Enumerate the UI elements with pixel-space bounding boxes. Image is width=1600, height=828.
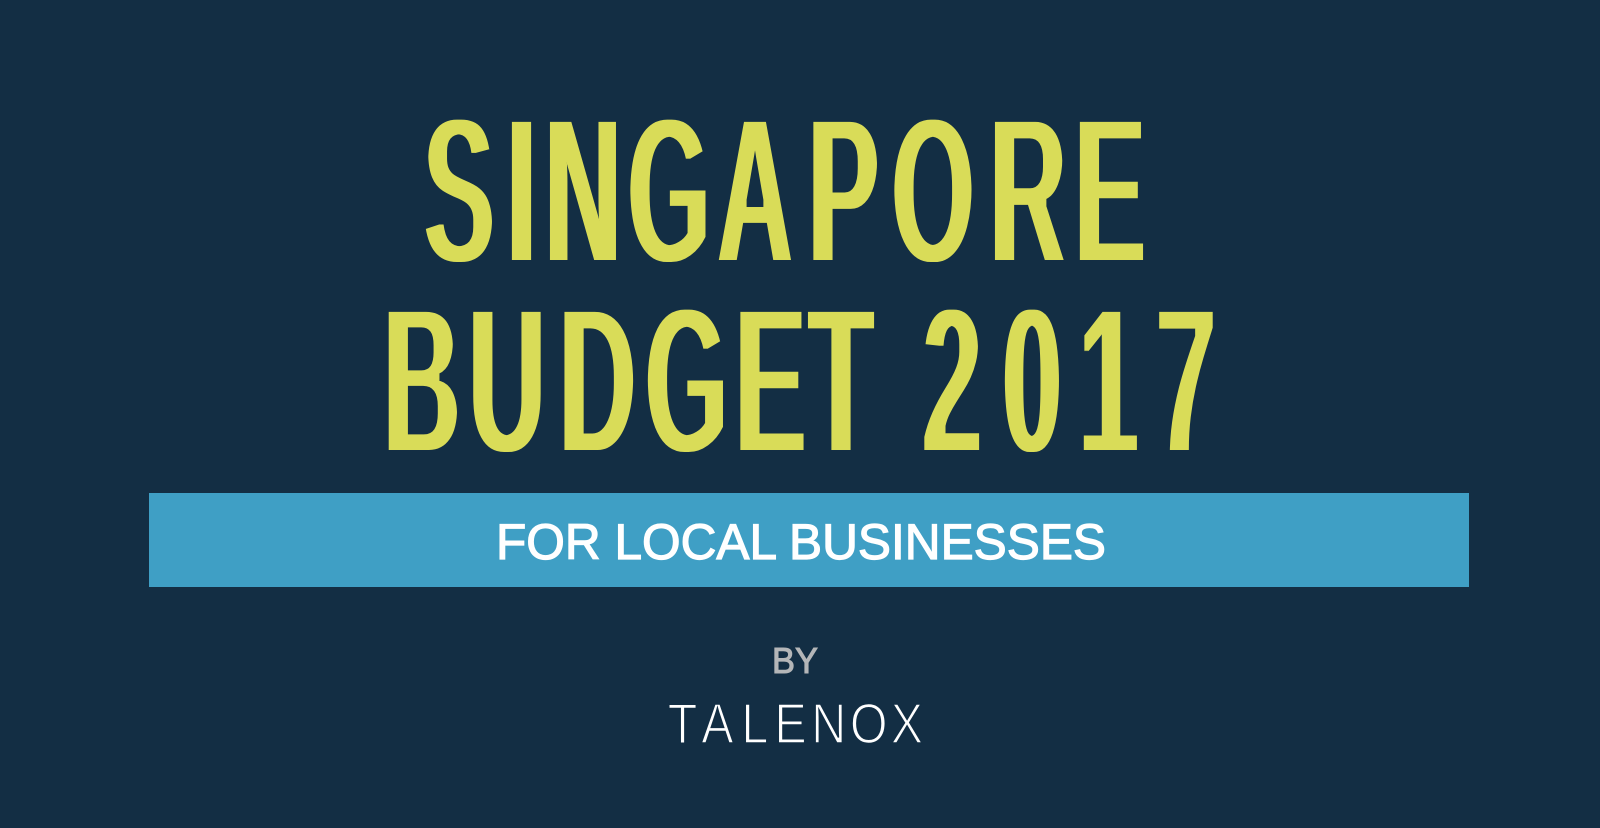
title: Singapore Budget 2017 [384, 74, 1215, 499]
banner text: FOR LOCAL BUSINESSES [496, 514, 1106, 570]
banner: for local businesses [149, 493, 1469, 587]
byline: by: BY [772, 640, 818, 681]
title line 2: BUDGET 2017 [384, 264, 1215, 499]
logo: Talenox wordmark: TALENOX [668, 692, 923, 756]
title line 1: SINGAPORE [424, 74, 1145, 309]
